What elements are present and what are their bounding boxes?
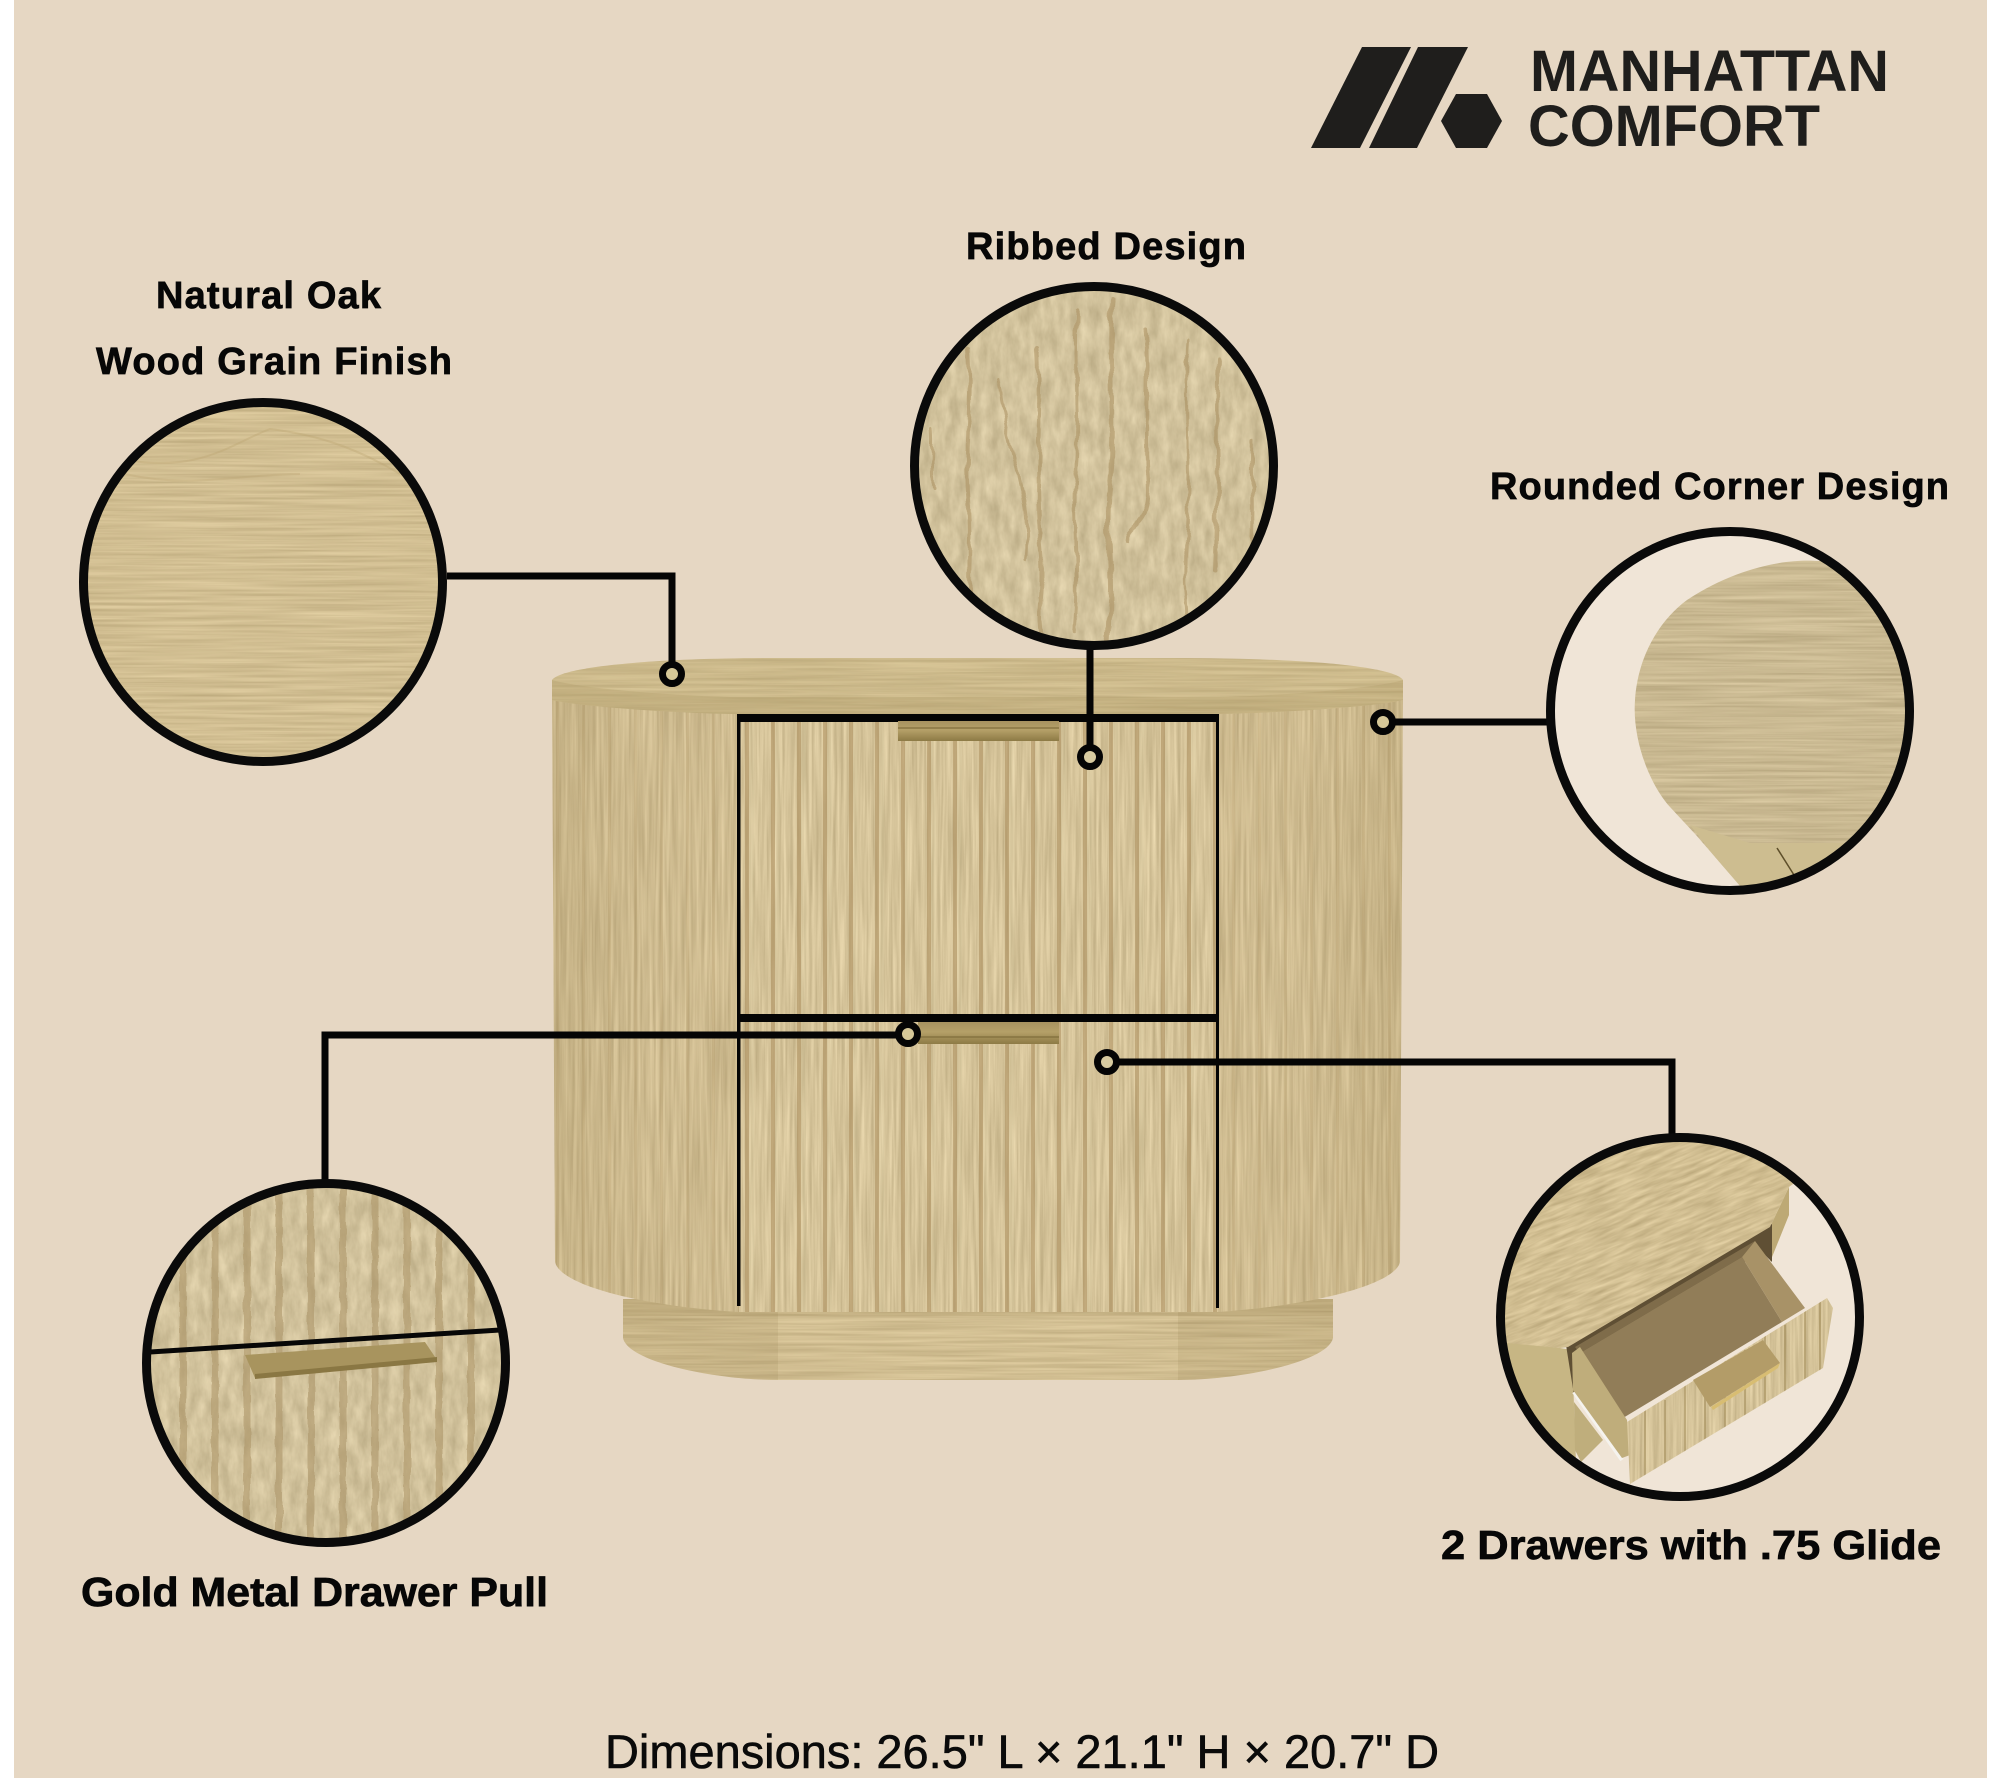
cabinet side <box>1507 1343 1576 1458</box>
bottom drawer pull <box>918 1022 1059 1044</box>
logo wordmark <box>1528 39 1889 159</box>
heading: Gold Metal Drawer Pull: Gold Metal Drawer Pull <box>81 1569 548 1615</box>
heading: Rounded Corner Design: Rounded Corner Design <box>1490 466 1949 508</box>
cabinet top <box>1505 1142 1794 1348</box>
detail circle: open drawer <box>1496 1133 1864 1501</box>
drawer gaps <box>737 714 1219 1308</box>
logo: Manhattan Comfort <box>1311 39 1889 159</box>
cabinet opening <box>1566 1224 1772 1395</box>
edge band <box>1691 826 1834 885</box>
heading: Natural Oak Wood Grain Finish: Wood Grain Finish <box>96 341 452 383</box>
oval top <box>552 656 1403 716</box>
detail circle: rounded corner <box>1550 531 1920 896</box>
heading: 2 Drawers with .75 Glide: 2 Drawers with .75 Glide <box>1441 1522 1941 1568</box>
drawer gap <box>150 1330 500 1352</box>
drawer back wall <box>1575 1241 1755 1353</box>
connector: ribbed design <box>1080 649 1100 766</box>
right pillar <box>1770 1187 1789 1262</box>
connector: two drawers <box>1098 1052 1672 1136</box>
drawer front <box>1627 1298 1833 1484</box>
logo wordmark: COMFORT <box>1528 94 1820 159</box>
top drawer pull <box>898 721 1059 741</box>
nightstand illustration <box>552 656 1403 1382</box>
detail circle: natural oak <box>79 398 447 766</box>
connector: natural oak <box>447 576 682 684</box>
drawer fronts <box>739 716 1217 1312</box>
logo mark <box>1311 47 1502 148</box>
drawer pull <box>1693 1340 1780 1410</box>
logo wordmark: MANHATTAN <box>1530 39 1889 104</box>
dimensions text: Dimensions: 26.5" L × 21.1" H × 20.7" D <box>605 1725 1439 1778</box>
slide <box>1574 1392 1622 1460</box>
detail circle: gold drawer pull <box>143 1179 511 1550</box>
lower drawer <box>1574 1402 1603 1462</box>
plinth base <box>620 1296 1336 1382</box>
heading: Natural Oak Wood Grain Finish <box>96 275 452 383</box>
drawer left wall <box>1572 1347 1630 1458</box>
heading: Natural Oak Wood Grain Finish: Natural Oak <box>156 275 382 317</box>
detail circle: ribbed design <box>910 283 1278 651</box>
connector: drawer pull <box>325 1024 918 1181</box>
gold pull <box>245 1342 437 1379</box>
heading: Ribbed Design: Ribbed Design <box>966 226 1246 268</box>
connector: rounded corner <box>1374 712 1548 732</box>
drawer interior floor <box>1580 1257 1782 1418</box>
drawer right wall <box>1742 1241 1805 1322</box>
cabinet body <box>552 680 1403 1320</box>
